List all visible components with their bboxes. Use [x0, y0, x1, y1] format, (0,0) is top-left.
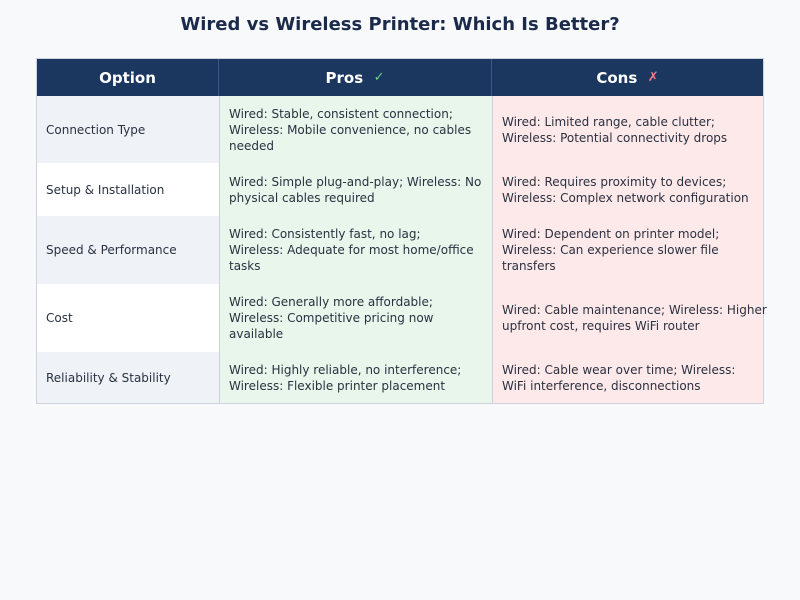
- table: upfront cost, requires WiFi router: [502, 319, 700, 333]
- table: Wireless: Complex network configuration: [502, 190, 749, 204]
- table: Wireless: Adequate for most home/office: [229, 243, 474, 257]
- header: cons: Cons: [596, 68, 637, 86]
- table: Wireless: Potential connectivity drops: [502, 130, 727, 144]
- table: Wireless: Mobile convenience, no cables: [229, 122, 471, 136]
- table: Wired: Stable, consistent connection;: [229, 106, 453, 120]
- table: tasks: [229, 259, 261, 273]
- row: connection type: Connection Type: [46, 122, 145, 136]
- row: reliability: Reliability & Stability: [46, 370, 171, 384]
- title: Wired vs Wireless Printer: Which Is Better?: [180, 14, 620, 35]
- table: Wired: Requires proximity to devices;: [502, 174, 726, 188]
- table: [36, 58, 764, 404]
- table: Wired: Cable maintenance; Wireless: Higher: [502, 303, 767, 317]
- header: pros: [219, 59, 492, 96]
- table: Wired: Limited range, cable clutter;: [502, 114, 715, 128]
- table: Wired: Simple plug-and-play; Wireless: No: [229, 174, 481, 188]
- row: setup: [37, 163, 219, 216]
- table: Wireless: Flexible printer placement: [229, 378, 445, 392]
- header: option: Option: [99, 68, 156, 86]
- table: physical cables required: [229, 190, 375, 204]
- row: connection type: [37, 96, 219, 163]
- table: Wireless: Competitive pricing now: [229, 311, 433, 325]
- table: Wired: Cable wear over time; Wireless:: [502, 362, 735, 376]
- table: WiFi interference, disconnections: [502, 378, 701, 392]
- table: Wired: Consistently fast, no lag;: [229, 227, 421, 241]
- header: cons: ✗: [648, 70, 659, 84]
- header: option: [37, 59, 219, 96]
- table: Wired: Dependent on printer model;: [502, 227, 719, 241]
- header: pros: ✓: [374, 70, 384, 84]
- table: available: [229, 327, 283, 341]
- row: speed: [37, 216, 219, 284]
- row: speed: Speed & Performance: [46, 243, 177, 257]
- table: Wired: Highly reliable, no interference;: [229, 362, 461, 376]
- row: setup: Setup & Installation: [46, 182, 164, 196]
- row: reliability: [37, 352, 219, 403]
- table: Wireless: Can experience slower file: [502, 243, 719, 257]
- header: cons: [492, 59, 763, 96]
- header: pros: Pros: [326, 68, 363, 86]
- row: cost: Cost: [46, 311, 73, 325]
- table: transfers: [502, 259, 556, 273]
- table: Wired: Generally more affordable;: [229, 295, 433, 309]
- row: cost: [37, 284, 219, 352]
- table: needed: [229, 138, 274, 152]
